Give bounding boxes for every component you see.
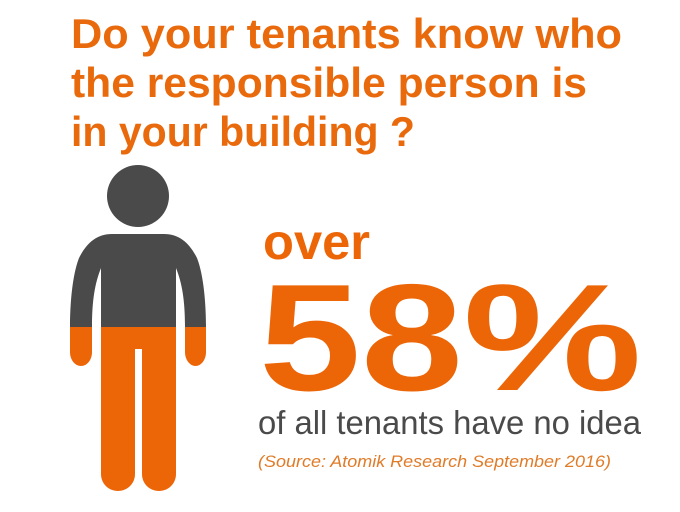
title: the responsible person is xyxy=(71,59,587,106)
caption: of all tenants have no idea xyxy=(258,404,642,441)
label: over: over xyxy=(263,214,370,270)
icon: person, 58% filled orange xyxy=(70,165,206,491)
title: Do your tenants know who xyxy=(71,10,622,57)
statistic: 58%: 58 xyxy=(259,253,463,423)
person head xyxy=(107,165,169,227)
source note: (Source: Atomik Research September 2016) xyxy=(258,452,611,471)
statistic: 58% xyxy=(259,253,642,423)
statistic: 58%: % xyxy=(463,253,642,423)
person lower body xyxy=(70,327,206,491)
title xyxy=(71,10,622,155)
title: in your building ? xyxy=(71,108,415,155)
person upper body xyxy=(70,234,206,327)
